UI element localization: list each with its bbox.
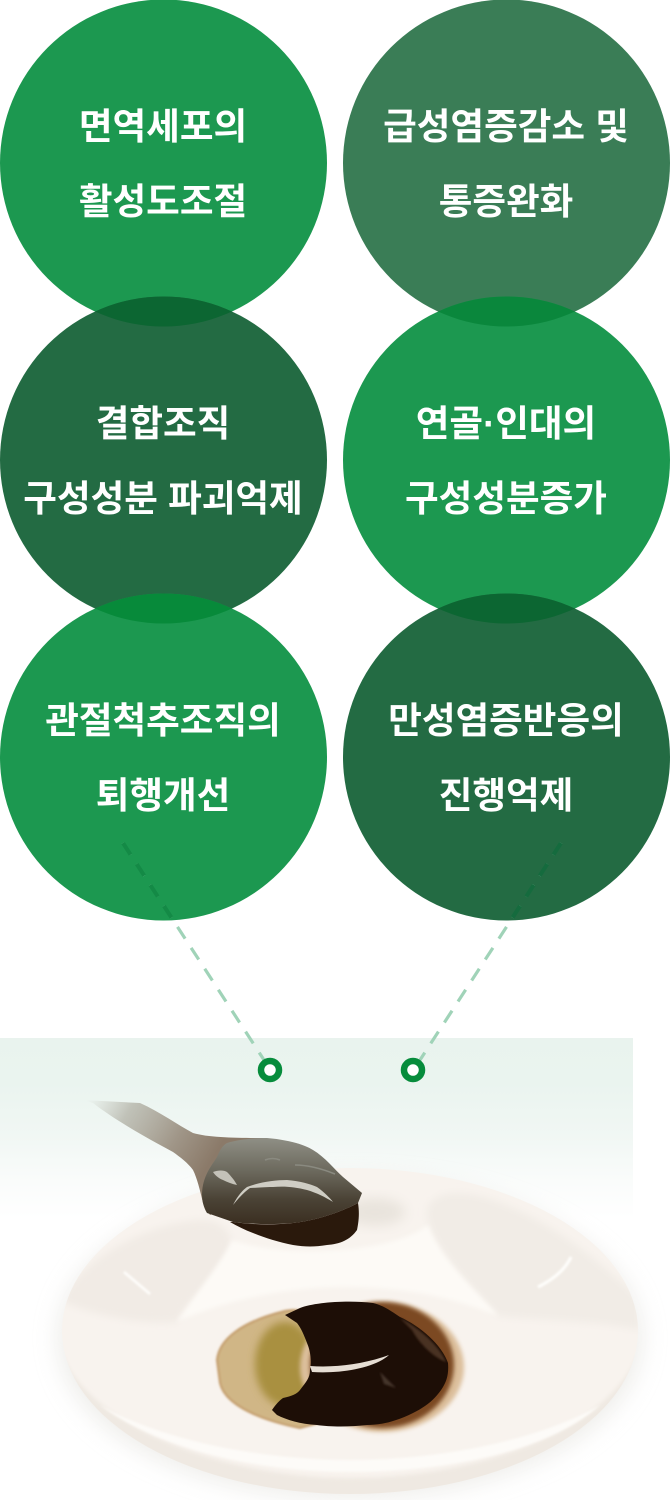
circle: immune cell activity: 면역세포의	[79, 106, 247, 147]
circle: joint and spine tissue: 퇴행개선	[96, 775, 230, 816]
circle: chronic inflammation	[343, 594, 670, 920]
marker dot left	[261, 1061, 279, 1079]
circle: cartilage and ligament	[343, 296, 670, 608]
circle: joint and spine tissue: 관절척추조직의	[45, 700, 281, 741]
circle: acute inflammation and pain relief	[343, 0, 670, 326]
circle: acute inflammation and pain relief: 통증완화	[439, 181, 573, 222]
circle: acute inflammation and pain relief: 급성염증감소 및	[383, 106, 629, 147]
circle: immune cell activity: 활성도조절	[79, 181, 247, 222]
circle: chronic inflammation: 진행억제	[439, 775, 573, 816]
circle: connective tissue: 구성성분 파괴억제	[23, 478, 303, 519]
spoon with jelly	[83, 1100, 362, 1246]
marker dot right	[404, 1061, 422, 1079]
plate with jelly	[58, 1168, 642, 1500]
photo background band	[0, 1038, 633, 1218]
circle: chronic inflammation: 만성염증반응의	[388, 700, 624, 741]
dashed connector right	[420, 843, 561, 1060]
circle: cartilage and ligament: 연골·인대의	[416, 403, 596, 444]
circle: connective tissue: 결합조직	[96, 403, 230, 444]
dashed connector left	[123, 843, 264, 1060]
circle: cartilage and ligament: 구성성분증가	[405, 478, 607, 519]
circle: immune cell activity	[0, 0, 327, 326]
circle: joint and spine tissue	[0, 594, 327, 920]
sauce puddle	[217, 1310, 330, 1428]
jelly	[272, 1302, 448, 1426]
circle: connective tissue	[0, 296, 327, 608]
